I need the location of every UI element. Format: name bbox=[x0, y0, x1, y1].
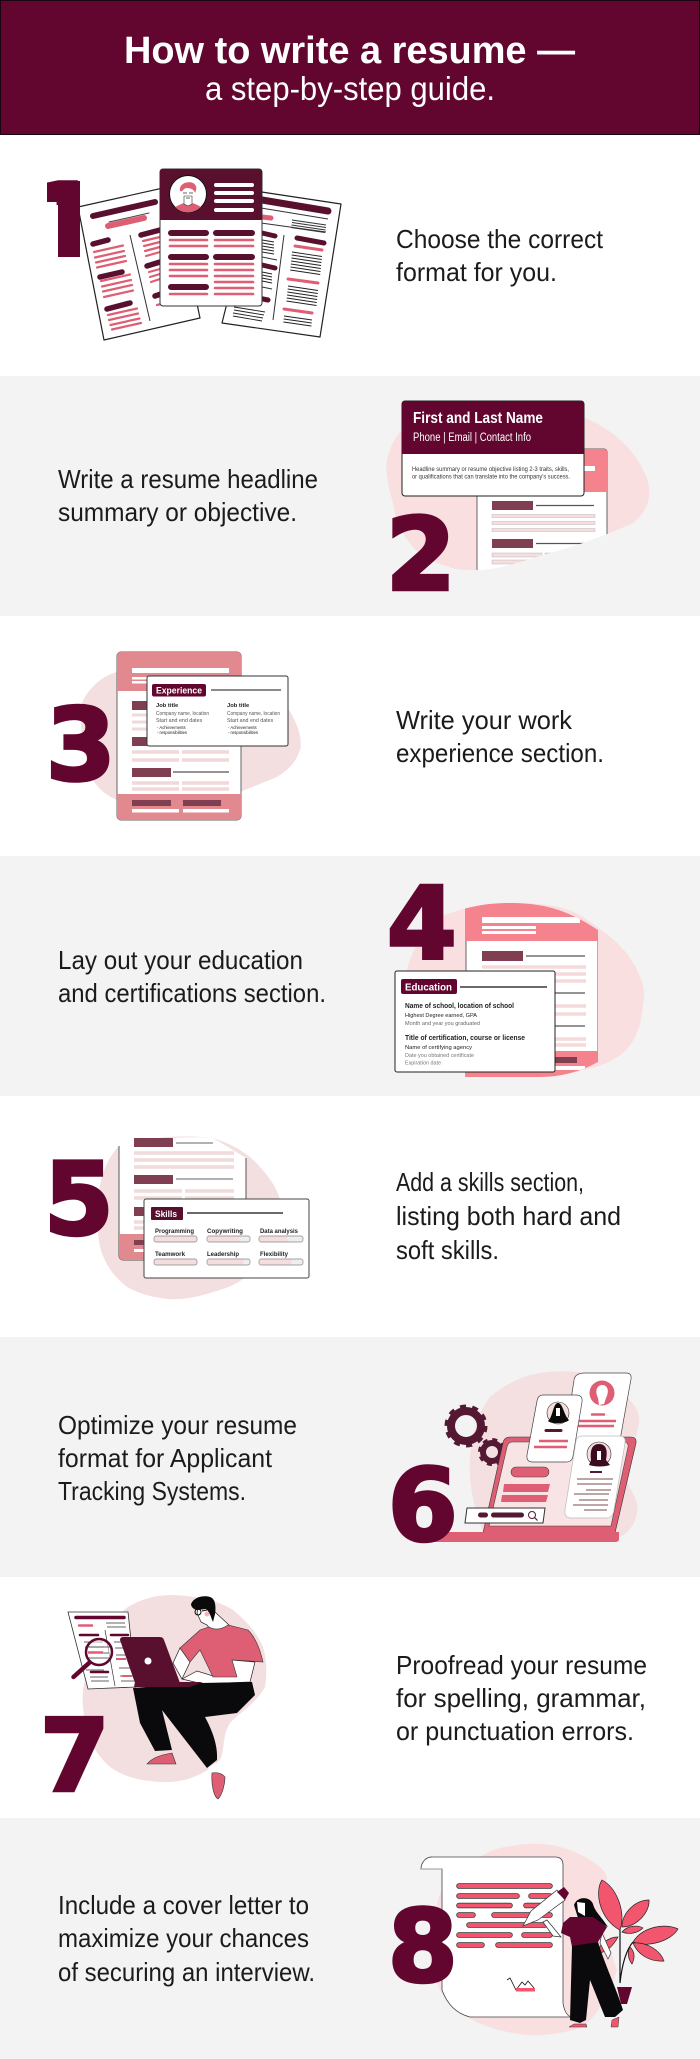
laptop bbox=[427, 1437, 636, 1542]
step 7 text: Proofread your resume bbox=[396, 1650, 647, 1680]
laptop bbox=[120, 1637, 203, 1687]
number 2: 2 bbox=[386, 496, 456, 614]
pencil bbox=[523, 1887, 569, 1926]
panel: step 3 bbox=[0, 616, 700, 856]
skills card: Skills bbox=[155, 1209, 177, 1220]
step 1 text: Choose the correct bbox=[396, 224, 604, 254]
education card: Title of certification, course or license bbox=[405, 1035, 525, 1042]
background resume page bbox=[477, 449, 607, 574]
experience card: Start and end dates bbox=[227, 718, 274, 724]
step 3 text bbox=[396, 705, 604, 768]
search bar bbox=[465, 1508, 545, 1523]
step 6 text: Tracking Systems. bbox=[58, 1476, 246, 1506]
arms bbox=[543, 1920, 611, 1959]
pink blob bbox=[81, 672, 301, 800]
hair and face bbox=[574, 1898, 608, 1927]
step 4 text bbox=[58, 945, 326, 1008]
education card: Date you obtained certificate bbox=[405, 1053, 474, 1059]
gears bbox=[446, 1406, 504, 1464]
experience card: - responsibilities bbox=[228, 730, 258, 735]
education card: Highest Degree earned, GPA bbox=[405, 1013, 477, 1019]
panel: step 4 bbox=[0, 856, 700, 1096]
trousers bbox=[570, 1942, 623, 2023]
t-shirt bbox=[180, 1625, 263, 1677]
signature bbox=[507, 1978, 535, 1992]
number 4: 4 bbox=[387, 866, 457, 982]
panel: step 1 bbox=[47, 168, 603, 341]
step 2 text: Write a resume headline bbox=[58, 464, 318, 494]
header banner bbox=[0, 0, 700, 134]
step 2 text: summary or objective. bbox=[58, 497, 297, 527]
experience card: Experience bbox=[156, 686, 202, 696]
experience card: Job title bbox=[227, 703, 250, 709]
illustration: laptop with applicant profiles bbox=[427, 1371, 639, 1542]
number 1: 1 bbox=[30, 162, 100, 279]
number 7: 7 bbox=[40, 1698, 110, 1814]
background resume page bbox=[119, 1137, 246, 1260]
illustration: three resumes bbox=[78, 169, 341, 340]
panel: step 7 bbox=[0, 1577, 700, 1818]
shirt bbox=[561, 1917, 607, 1947]
skills card: Programming bbox=[155, 1228, 194, 1235]
education card: Name of school, location of school bbox=[405, 1003, 514, 1010]
title: How to write a resume — bbox=[124, 30, 575, 72]
panel: step 8 bbox=[0, 1818, 700, 2059]
number 6: 6 bbox=[388, 1447, 458, 1564]
step 8 text: Include a cover letter to bbox=[58, 1890, 309, 1920]
step 5 text: Add a skills section, bbox=[396, 1167, 584, 1197]
skills card bbox=[144, 1199, 309, 1278]
step 6 text: format for Applicant bbox=[58, 1443, 273, 1473]
trousers bbox=[133, 1682, 255, 1768]
profile card back bbox=[565, 1373, 631, 1440]
pink blob bbox=[407, 903, 644, 1077]
avatar bbox=[170, 176, 206, 212]
step 8 text: maximize your chances bbox=[58, 1923, 309, 1953]
education card: Name of certifying agency bbox=[405, 1045, 472, 1051]
number 5: 5 bbox=[44, 1141, 114, 1258]
experience card: Company name, location bbox=[227, 711, 280, 717]
step 2 text bbox=[58, 464, 318, 527]
step 4 text: and certifications section. bbox=[58, 978, 326, 1008]
cover letter page bbox=[421, 1857, 572, 2017]
education card: Month and year you graduated bbox=[405, 1021, 480, 1027]
step 6 text: Optimize your resume bbox=[58, 1410, 297, 1440]
subtitle: a step-by-step guide. bbox=[205, 70, 495, 107]
right sock and shoe bbox=[208, 1763, 218, 1773]
experience card: - Achievements bbox=[157, 725, 186, 730]
skills card: Leadership bbox=[207, 1251, 239, 1258]
pink blob bbox=[386, 409, 649, 570]
illustration: education card bbox=[395, 900, 644, 1081]
profile card left bbox=[527, 1395, 582, 1462]
education card bbox=[395, 971, 555, 1072]
glasses bbox=[195, 1609, 207, 1615]
step 7 text: for spelling, grammar, bbox=[396, 1683, 646, 1713]
step 4 text: Lay out your education bbox=[58, 945, 303, 975]
shoes bbox=[569, 2024, 587, 2027]
panel: step 5 bbox=[0, 1096, 700, 1337]
illustration: skills card bbox=[97, 1136, 309, 1299]
experience card: Start and end dates bbox=[156, 718, 203, 724]
step 8 text bbox=[58, 1890, 315, 1987]
skills card: Teamwork bbox=[155, 1251, 185, 1258]
number 1 bbox=[47, 180, 80, 257]
headline card: Phone | Email | Contact Info bbox=[413, 432, 531, 444]
skills card: Flexibility bbox=[260, 1251, 288, 1258]
headline card: Headline summary or resume objective listing 2-3 traits, skills, bbox=[412, 466, 569, 473]
step 7 text bbox=[396, 1650, 647, 1746]
background resume page bbox=[466, 900, 598, 1081]
step 5 text: soft skills. bbox=[396, 1235, 499, 1265]
headline card: or qualifications that can translate into the company's success. bbox=[412, 474, 570, 480]
right resume page bbox=[222, 191, 341, 337]
step 5 text bbox=[396, 1167, 621, 1265]
step 1 text bbox=[396, 224, 604, 287]
center resume card bbox=[160, 169, 262, 306]
experience card: - responsibilities bbox=[157, 730, 187, 735]
experience card bbox=[147, 676, 288, 746]
skills card: Data analysis bbox=[260, 1228, 298, 1235]
left shoe bbox=[147, 1753, 176, 1764]
step 7 text: or punctuation errors. bbox=[396, 1716, 634, 1746]
education card: Expiration date bbox=[405, 1060, 441, 1066]
hair bbox=[191, 1596, 215, 1622]
pink blob bbox=[430, 1844, 617, 2035]
pink blob bbox=[470, 1371, 639, 1537]
step 8 text: of securing an interview. bbox=[58, 1957, 315, 1987]
illustration: person proofreading on laptop bbox=[68, 1595, 266, 1799]
arms bbox=[173, 1648, 255, 1684]
experience card: Job title bbox=[156, 703, 179, 709]
magnifying glass bbox=[74, 1639, 112, 1677]
step 5 text: listing both hard and bbox=[396, 1201, 621, 1231]
plant bbox=[597, 1880, 678, 2004]
person bbox=[133, 1596, 263, 1799]
left resume page bbox=[78, 186, 200, 340]
experience card: - Achievements bbox=[228, 725, 257, 730]
step 6 text bbox=[58, 1410, 297, 1506]
profile card front bbox=[565, 1436, 625, 1518]
education card: Education bbox=[405, 982, 452, 994]
woman with pencil bbox=[523, 1887, 623, 2027]
pink blob bbox=[97, 1136, 280, 1299]
experience card: Company name, location bbox=[156, 711, 209, 717]
resume sheet bbox=[68, 1612, 136, 1689]
skills card: Copywriting bbox=[207, 1228, 243, 1235]
illustration: headline card bbox=[386, 401, 649, 574]
step 1 text: format for you. bbox=[396, 257, 557, 287]
panel: step 6 bbox=[0, 1337, 700, 1577]
number 3: 3 bbox=[46, 686, 116, 804]
panel: step 2 bbox=[0, 376, 700, 616]
illustration: experience card bbox=[81, 652, 301, 820]
illustration: cover letter, woman and plant bbox=[421, 1844, 678, 2035]
neck and face bbox=[197, 1601, 229, 1630]
pink blob bbox=[83, 1595, 266, 1782]
step 3 text: Write your work bbox=[396, 705, 573, 735]
step 3 text: experience section. bbox=[396, 738, 604, 768]
headline card bbox=[402, 401, 584, 496]
background resume page bbox=[117, 652, 241, 820]
headline card: First and Last Name bbox=[413, 410, 543, 427]
number 8: 8 bbox=[388, 1888, 458, 2005]
